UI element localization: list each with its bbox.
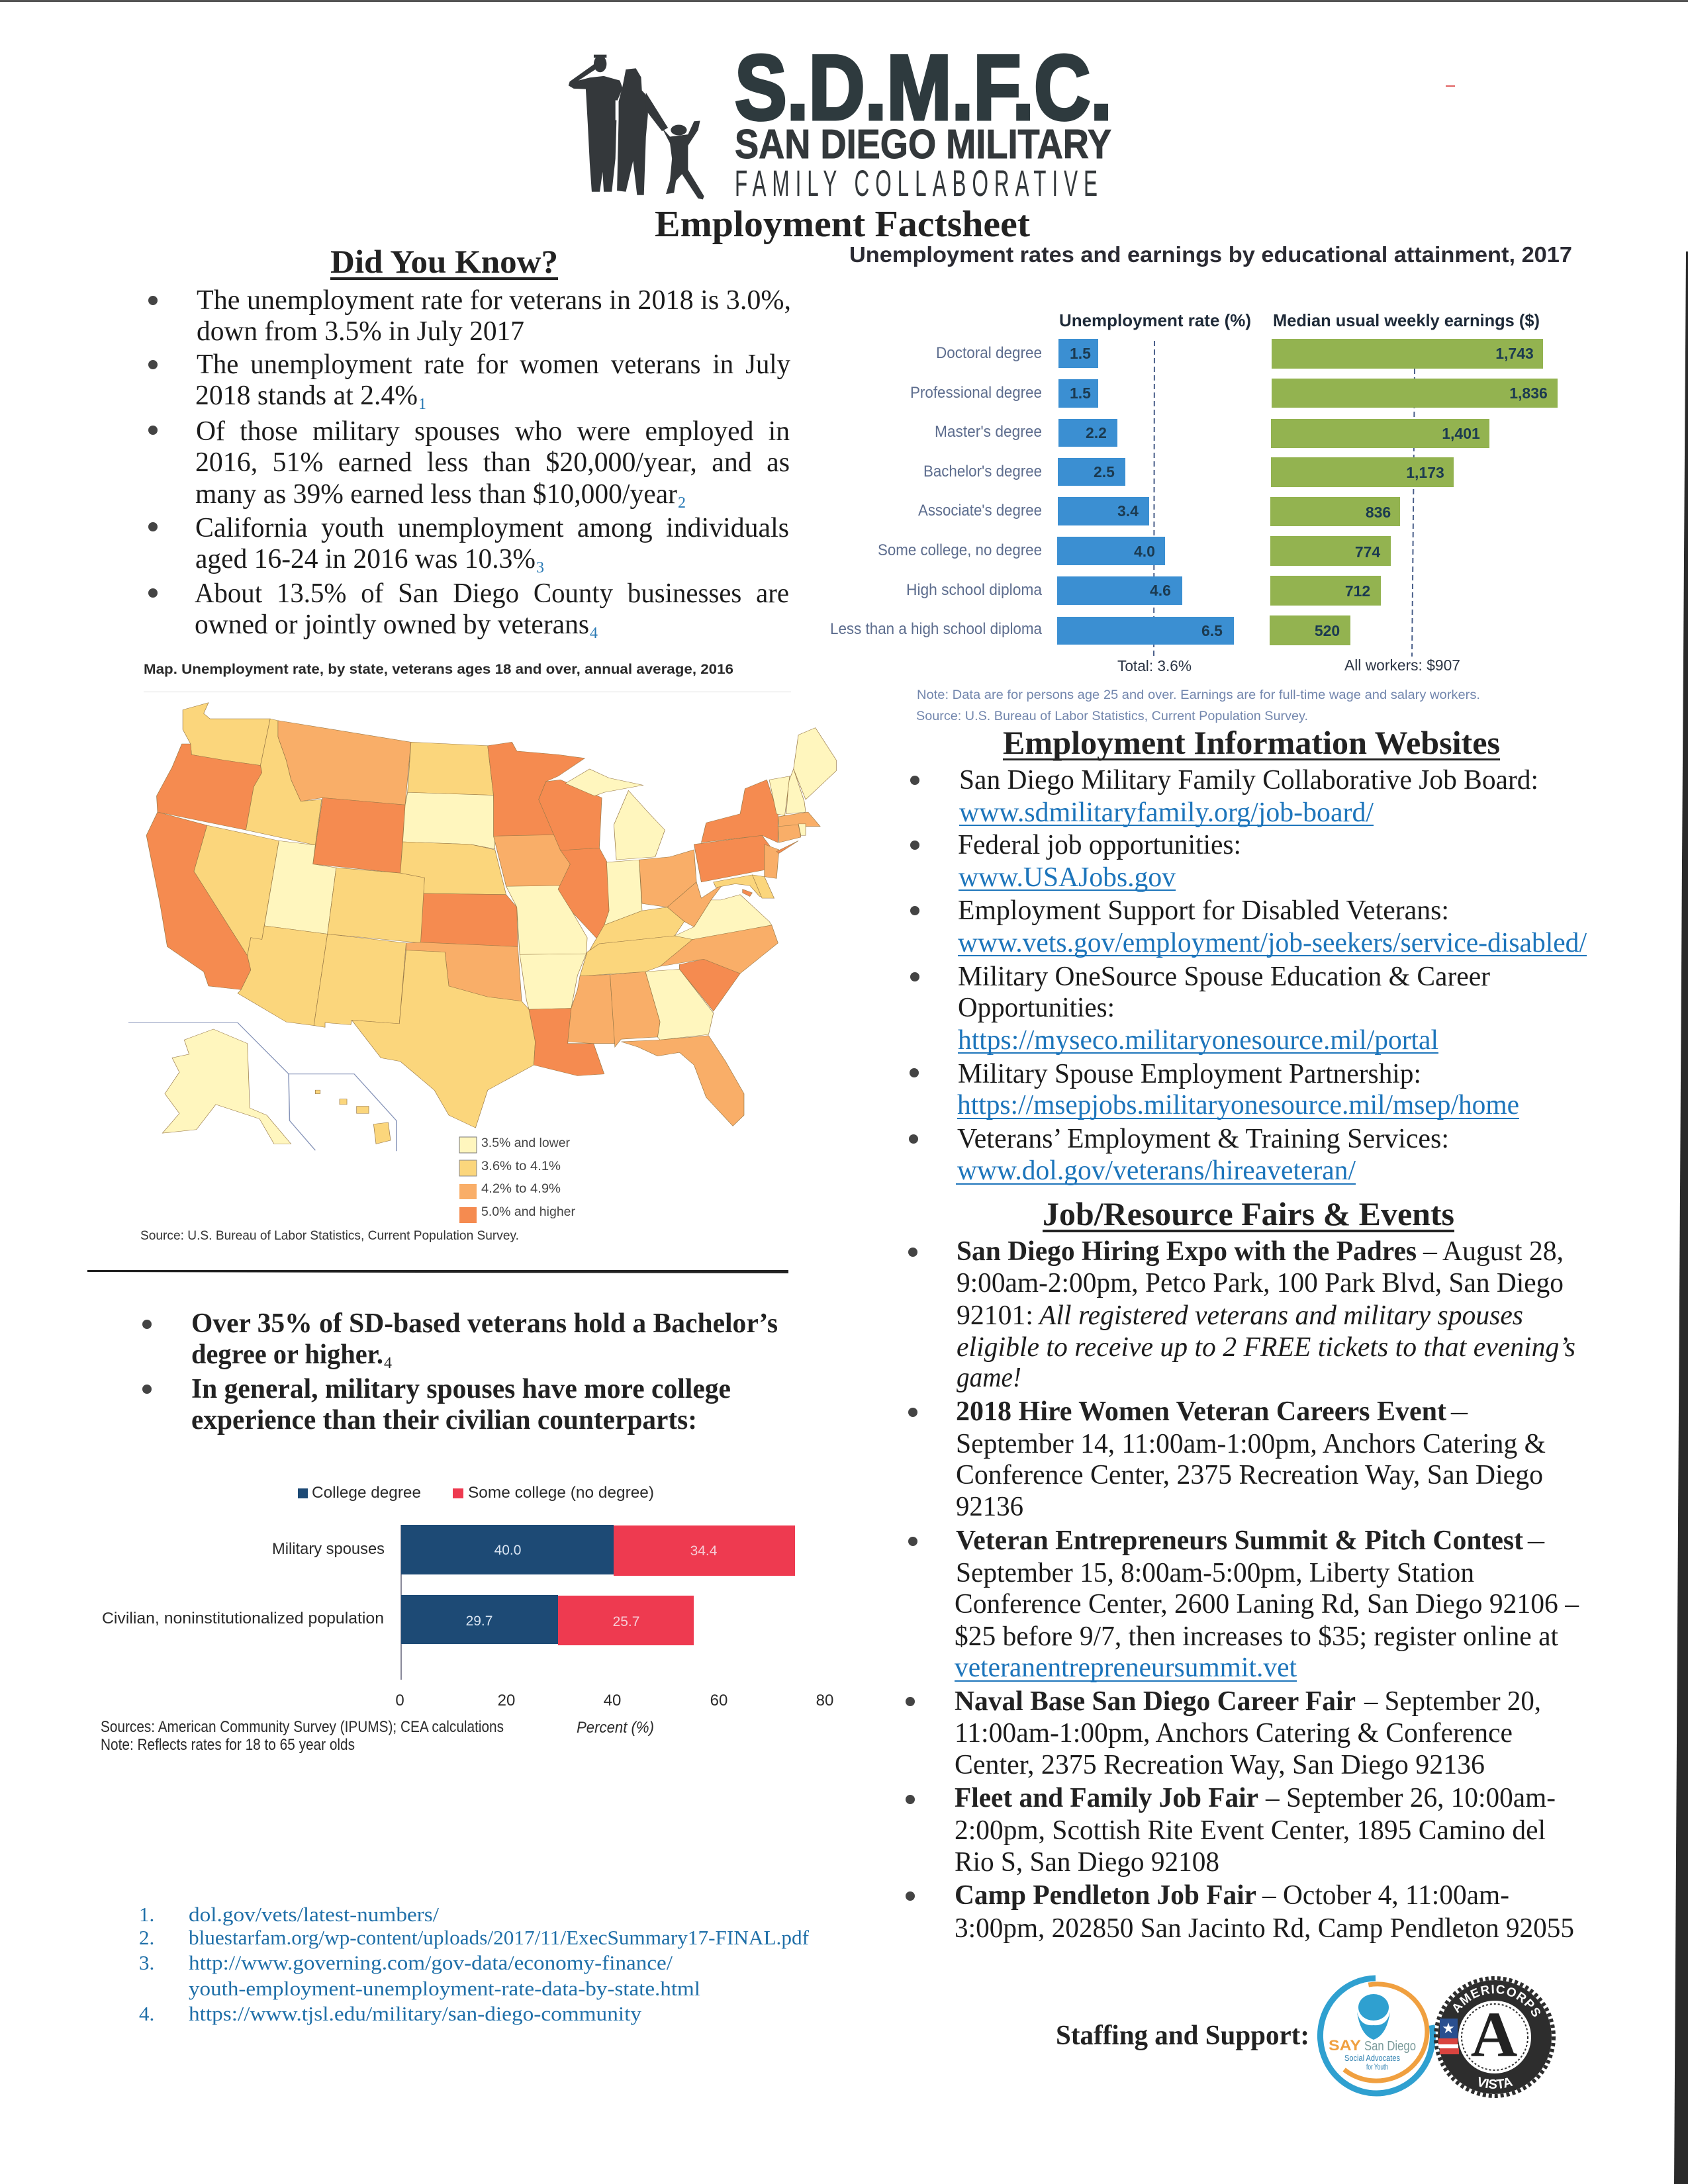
map legend: 3.6% to 4.1% — [481, 1160, 561, 1173]
earnings bars — [1270, 339, 1558, 645]
chart legend: College degree — [312, 1484, 421, 1502]
logo: AmeriCorps VISTA: AMERICORPS — [1453, 1984, 1540, 2017]
chart legend: Some college (no degree) — [468, 1484, 654, 1502]
unemployment bars: 4.0 — [1134, 543, 1155, 560]
unemployment bars: 1.5 — [1070, 345, 1091, 362]
civilian bar: Civilian, noninstitutionalized population — [102, 1610, 384, 1627]
earnings bars: 836 — [1366, 504, 1391, 521]
military spouses bar: Military spouses — [272, 1540, 385, 1558]
text block: college bullets: experience than their civilian counterparts: — [191, 1405, 697, 1435]
military spouses bar: 34.4 — [690, 1543, 718, 1559]
staffing label: Staffing and Support: — [1056, 2021, 1309, 2051]
text block: did you know bullets: down from 3.5% in July 2017 — [197, 316, 524, 347]
text block: websites list: https://myseco.militaryonesource.mil/portal — [958, 1025, 1438, 1056]
text block: college bullets: 4 — [384, 1355, 392, 1372]
text block: college bullets: In general, military spouses have more college — [191, 1374, 731, 1404]
earnings bars: 1,743 — [1495, 345, 1534, 362]
logo: organization wordmark — [735, 36, 1112, 204]
unemployment bars: 1.5 — [1070, 385, 1091, 402]
event: Naval Base: Center, 2375 Recreation Way, San Diego 92136 — [955, 1750, 1485, 1780]
column headers — [1059, 310, 1540, 330]
text block: did you know bullets: 2016, 51% earned less than $20,000/year, and as — [195, 447, 790, 478]
event: Padres expo: – August 28, — [1423, 1236, 1564, 1267]
event: Camp Pendleton: 3:00pm, 202850 San Jacinto Rd, Camp Pendleton 92055 — [955, 1913, 1574, 1944]
earnings bars: 774 — [1355, 543, 1380, 561]
event: Padres expo: 9:00am-2:00pm, Petco Park, 100 Park Blvd, San Diego — [957, 1268, 1564, 1298]
unemployment bars: 6.5 — [1201, 622, 1223, 639]
logo: SAY San Diego: San Diego — [1364, 2039, 1416, 2054]
event: Naval Base: Naval Base San Diego Career Fair — [955, 1686, 1356, 1717]
event: Entrepreneurs Summit: Veteran Entrepreneurs Summit & Pitch Contest — [956, 1525, 1523, 1556]
chart source — [101, 1718, 654, 1754]
reference line labels: All workers: $907 — [1344, 657, 1460, 674]
text block: did you know bullets: About 13.5% of San Diego County businesses are — [195, 578, 789, 609]
text block: websites list: www.sdmilitaryfamily.org/job-board/ — [959, 797, 1374, 828]
footnotes: 4. — [139, 2002, 154, 2025]
text block: did you know bullets: many as 39% earned less than $10,000/year — [195, 479, 677, 510]
logo: AmeriCorps VISTA: A — [1471, 1999, 1518, 2071]
event: Naval Base: – September 20, — [1364, 1686, 1541, 1717]
logo: family silhouette — [569, 55, 704, 199]
unemployment bars: 4.6 — [1150, 582, 1171, 599]
text block: events list — [906, 1236, 1579, 1944]
text block: did you know bullets: 4 — [590, 625, 598, 642]
text block: did you know bullets: owned or jointly owned by veterans — [195, 610, 589, 640]
chart source: Sources: American Community Survey (IPUMS); CEA calculations — [101, 1718, 504, 1736]
footnotes: dol.gov/vets/latest-numbers/ — [189, 1903, 439, 1926]
text block: did you know bullets: 2 — [678, 494, 686, 512]
footnotes: https://www.tjsl.edu/military/san-diego-community — [189, 2002, 642, 2025]
event: Padres expo — [908, 1236, 1575, 1393]
chart title: unemployment and earnings: Unemployment rates and earnings by educational attainment, 2017 — [849, 242, 1572, 267]
text block: websites list: www.dol.gov/veterans/hireaveteran/ — [957, 1156, 1356, 1186]
earnings bars: 712 — [1345, 582, 1370, 600]
map legend — [459, 1136, 576, 1223]
unemployment bars — [1057, 339, 1234, 645]
unemployment bars: 3.4 — [1117, 502, 1139, 520]
x axis labels: 0 — [395, 1692, 404, 1709]
column headers: Median usual weekly earnings ($) — [1273, 310, 1540, 330]
map: US unemployment by state — [128, 703, 836, 1151]
logo: AmeriCorps VISTA: ★ — [1442, 2020, 1455, 2036]
footnotes: http://www.governing.com/gov-data/economy-finance/ — [189, 1951, 673, 1974]
map title: Map. Unemployment rate, by state, veterans ages 18 and over, annual average, 2016 — [144, 662, 733, 677]
civilian bar: 29.7 — [466, 1614, 492, 1629]
x axis labels: 60 — [710, 1692, 727, 1709]
map legend: 5.0% and higher — [481, 1205, 576, 1219]
event: Naval Base: 11:00am-1:00pm, Anchors Catering & Conference — [955, 1718, 1513, 1749]
logo: SAY San Diego: for Youth — [1366, 2062, 1388, 2071]
event: Fleet and Family: Rio S, San Diego 92108 — [955, 1847, 1219, 1878]
text block: websites list: Opportunities: — [958, 993, 1115, 1023]
category labels: High school diploma — [906, 581, 1043, 599]
category labels: Doctoral degree — [936, 344, 1042, 362]
logo: SAY San Diego: SAY — [1329, 2037, 1361, 2054]
category labels: Master's degree — [935, 423, 1042, 441]
event: Fleet and Family: Fleet and Family Job Fair — [955, 1783, 1258, 1813]
category labels: Professional degree — [910, 384, 1042, 402]
text block: websites list — [909, 765, 1587, 1186]
logo: organization wordmark: FAMILY COLLABORATIVE — [735, 162, 1103, 204]
heading: Employment Information Websites: Employment Information Websites — [1003, 724, 1500, 761]
event: Hire Women Veteran: Conference Center, 2375 Recreation Way, San Diego — [956, 1460, 1543, 1490]
event: Padres expo: eligible to receive up to 2 FREE tickets to that evening’s — [957, 1332, 1575, 1363]
unemployment bars: 2.5 — [1094, 463, 1115, 480]
event: Camp Pendleton — [906, 1880, 1574, 1944]
text block: websites list: www.vets.gov/employment/job-seekers/service-disabled/ — [958, 928, 1587, 958]
reference line labels — [1117, 657, 1460, 674]
event: Entrepreneurs Summit — [908, 1525, 1579, 1683]
military spouses bar — [272, 1525, 795, 1576]
chart: unemployment and earnings by education — [830, 310, 1558, 723]
text block: did you know bullets: California youth unemployment among individuals — [195, 513, 789, 543]
earnings bars: 520 — [1315, 622, 1340, 639]
column headers: Unemployment rate (%) — [1059, 310, 1251, 330]
military spouses bar: 40.0 — [494, 1543, 521, 1558]
chart note: Note: Data are for persons age 25 and over. Earnings are for full-time wage and salary workers. — [917, 688, 1480, 702]
text block: did you know bullets: The unemployment rate for women veterans in July — [197, 349, 790, 380]
map source: Source: U.S. Bureau of Labor Statistics, Current Population Survey. — [140, 1229, 519, 1243]
event: Padres expo: game! — [957, 1363, 1021, 1393]
text block: did you know bullets: 2018 stands at 2.4% — [195, 381, 418, 411]
event: Padres expo: All registered veterans and military spouses — [1037, 1300, 1523, 1331]
text block: websites list: Military Spouse Employment Partnership: — [958, 1059, 1421, 1089]
earnings bars: 1,173 — [1406, 464, 1444, 481]
earnings bars: 1,836 — [1509, 385, 1548, 402]
unemployment bars: 2.2 — [1086, 424, 1107, 441]
chart: college experience stacked bars — [101, 1484, 833, 1754]
footnotes: 1. — [139, 1903, 154, 1926]
chart source: Note: Reflects rates for 18 to 65 year olds — [101, 1736, 355, 1754]
event: Padres expo: 92101: — [957, 1300, 1033, 1331]
text block: websites list: Military OneSource Spouse Education & Career — [958, 962, 1490, 992]
event: Fleet and Family: – September 26, 10:00am- — [1265, 1783, 1556, 1813]
footnotes: bluestarfam.org/wp-content/uploads/2017/11/ExecSummary17-FINAL.pdf — [189, 1926, 810, 1949]
reference line labels: Total: 3.6% — [1117, 657, 1192, 674]
heading: Did You Know: Did You Know? — [330, 243, 558, 280]
category labels: Less than a high school diploma — [830, 620, 1043, 638]
logo: SAY San Diego — [1319, 1976, 1435, 2093]
text block: did you know bullets — [148, 285, 791, 642]
x axis labels: 40 — [604, 1692, 621, 1709]
text block: websites list: Veterans’ Employment & Training Services: — [957, 1124, 1449, 1154]
text block: did you know bullets: Of those military spouses who were employed in — [196, 416, 790, 447]
event: Entrepreneurs Summit: Conference Center, 2600 Laning Rd, San Diego 92106 – — [955, 1589, 1579, 1619]
title: Employment Factsheet — [655, 204, 1030, 245]
event: Entrepreneurs Summit: September 15, 8:00am-5:00pm, Liberty Station — [956, 1558, 1474, 1588]
event: Hire Women Veteran: 92136 — [956, 1492, 1023, 1522]
text block: college bullets — [142, 1308, 778, 1435]
x axis labels: 80 — [816, 1692, 833, 1709]
text block: did you know bullets: 3 — [536, 559, 544, 576]
text block: college bullets: degree or higher. — [191, 1340, 383, 1370]
event: Hire Women Veteran — [908, 1396, 1546, 1522]
map legend: 3.5% and lower — [481, 1136, 571, 1150]
event: Naval Base — [906, 1686, 1541, 1780]
logo: SAY San Diego: Social Advocates — [1344, 2053, 1400, 2063]
event: Camp Pendleton: – October 4, 11:00am- — [1262, 1880, 1509, 1911]
event: Camp Pendleton: Camp Pendleton Job Fair — [955, 1880, 1256, 1911]
event: Entrepreneurs Summit: $25 before 9/7, then increases to $35; register online at — [955, 1621, 1558, 1652]
event: Hire Women Veteran: September 14, 11:00am-1:00pm, Anchors Catering & — [956, 1429, 1546, 1459]
footnotes: 2. — [139, 1926, 154, 1949]
event: Fleet and Family — [906, 1783, 1556, 1878]
text block: did you know bullets: aged 16-24 in 2016 was 10.3% — [195, 544, 536, 574]
text block: websites list: Federal job opportunities: — [958, 830, 1241, 860]
category labels — [830, 344, 1043, 638]
text block: websites list: www.USAJobs.gov — [959, 862, 1176, 893]
earnings bars: 1,401 — [1442, 425, 1480, 442]
x axis labels: 20 — [498, 1692, 515, 1709]
text block: college bullets: Over 35% of SD-based veterans hold a Bachelor’s — [191, 1308, 778, 1339]
event: Padres expo: San Diego Hiring Expo with the Padres — [957, 1236, 1417, 1267]
logo: organization wordmark: S.D.M.F.C. — [735, 36, 1112, 139]
event: Hire Women Veteran: – — [1450, 1396, 1468, 1427]
footnotes: youth-employment-unemployment-rate-data-by-state.html — [189, 1977, 700, 2000]
footnotes: 3. — [139, 1951, 154, 1974]
event: Hire Women Veteran: 2018 Hire Women Veteran Careers Event — [956, 1396, 1446, 1427]
logo: AmeriCorps VISTA — [1434, 1976, 1556, 2098]
category labels: Associate's degree — [918, 502, 1042, 520]
logo: organization wordmark: SAN DIEGO MILITARY — [735, 122, 1111, 167]
map legend: 4.2% to 4.9% — [481, 1182, 561, 1196]
text block: did you know bullets: The unemployment rate for veterans in 2018 is 3.0%, — [197, 285, 791, 316]
logo: AmeriCorps VISTA: VISTA — [1479, 2077, 1513, 2089]
event: Fleet and Family: 2:00pm, Scottish Rite Event Center, 1895 Camino del — [955, 1815, 1546, 1846]
event: Entrepreneurs Summit: veteranentrepreneursummit.vet — [955, 1653, 1297, 1683]
text block: did you know bullets: 1 — [418, 396, 426, 413]
category labels: Some college, no degree — [878, 541, 1042, 559]
event: Entrepreneurs Summit: – — [1527, 1525, 1545, 1556]
civilian bar: 25.7 — [613, 1614, 639, 1629]
text block: websites list: Employment Support for Disabled Veterans: — [958, 895, 1449, 926]
civilian bar — [102, 1595, 694, 1645]
category labels: Bachelor's degree — [923, 463, 1042, 480]
x axis labels — [395, 1692, 833, 1709]
heading: Job/Resource Fairs & Events: Job/Resource Fairs & Events — [1043, 1195, 1454, 1232]
chart note: Source: U.S. Bureau of Labor Statistics, Current Population Survey. — [916, 709, 1308, 723]
footnotes — [139, 1903, 810, 2025]
text block: websites list: https://msepjobs.militaryonesource.mil/msep/home — [957, 1090, 1519, 1120]
chart note — [916, 688, 1480, 723]
text block: websites list: San Diego Military Family Collaborative Job Board: — [959, 765, 1538, 796]
chart legend — [298, 1484, 654, 1502]
chart source: Percent (%) — [577, 1719, 654, 1737]
